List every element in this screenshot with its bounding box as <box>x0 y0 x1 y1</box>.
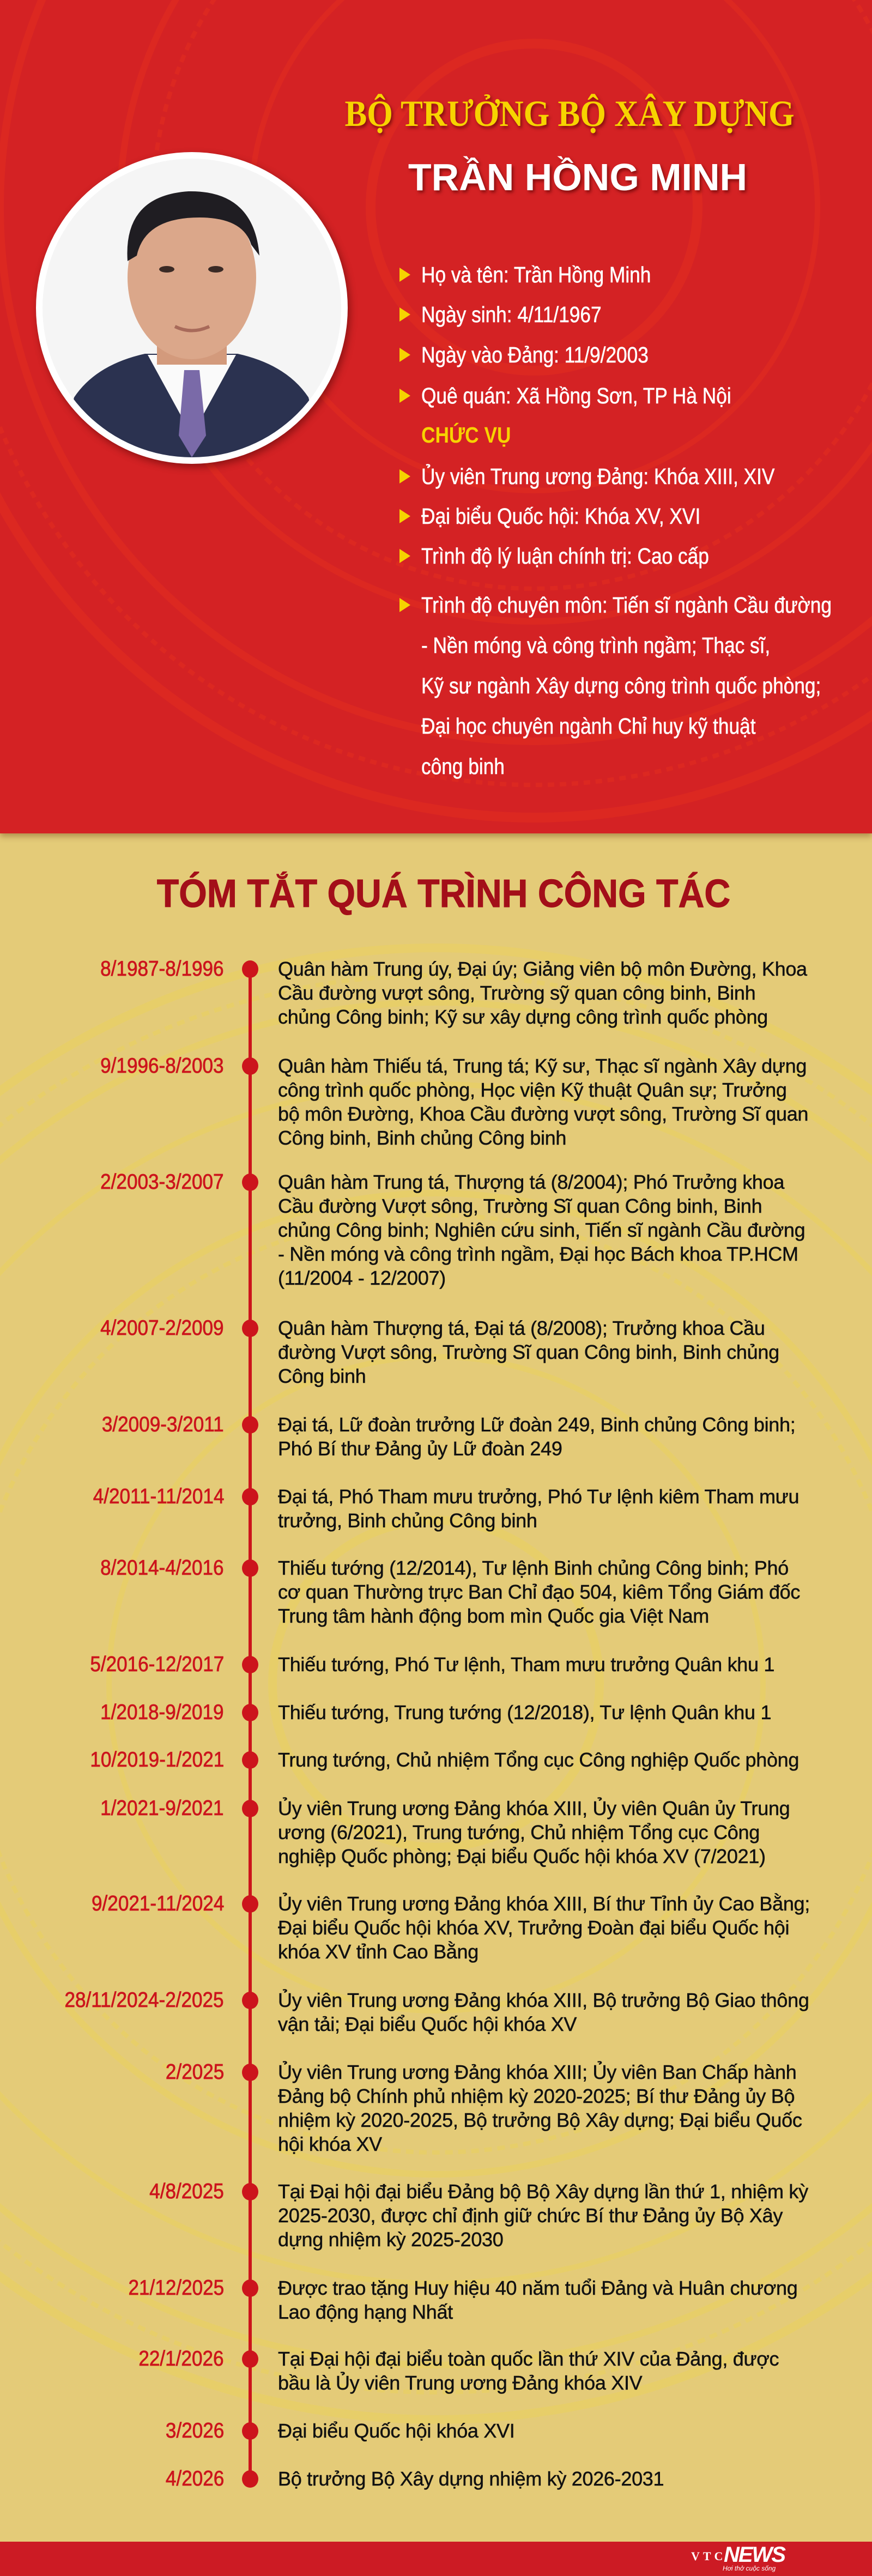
info list: Họ và tên: Trần Hồng Minh <box>421 262 651 287</box>
entry 11: Ủy viên Trung ương Đảng khóa XIII, Ủy viên Quân ủy Trung <box>278 1797 790 1819</box>
logo: VTC News: VTC <box>691 2549 726 2563</box>
entry 16: Lao động hạng Nhất <box>278 2301 453 2323</box>
entry 4: Quân hàm Thượng tá, Đại tá (8/2008); Trưởng khoa Cầu <box>278 1317 765 1339</box>
entry 15: Tại Đại hội đại biểu Đảng bộ Bộ Xây dựng lần thứ 1, nhiệm kỳ <box>278 2180 808 2203</box>
entry 11 <box>101 1797 790 1867</box>
entry 17: Tại Đại hội đại biểu toàn quốc lần thứ XIV của Đảng, được <box>278 2348 779 2370</box>
timeline axis <box>249 969 252 2479</box>
entry 4: đường Vượt sông, Trường Sĩ quan Công binh, Binh chủng <box>278 1341 779 1363</box>
entry 14: nhiệm kỳ 2020-2025, Bộ trưởng Bộ Xây dựng; Đại biểu Quốc <box>278 2109 802 2131</box>
entry 16: 21/12/2025 <box>128 2276 224 2300</box>
entry 14: Đảng bộ Chính phủ nhiệm kỳ 2020-2025; Bí thư Đảng ủy Bộ <box>278 2085 795 2107</box>
entry 19: Bộ trưởng Bộ Xây dựng nhiệm kỳ 2026-2031 <box>278 2468 664 2490</box>
entry 1: 8/1987-8/1996 <box>101 957 224 981</box>
entry 6: 4/2011-11/2014 <box>93 1485 224 1508</box>
entry 15: dựng nhiệm kỳ 2025-2030 <box>278 2228 503 2251</box>
info list: công binh <box>421 754 505 779</box>
entry 3: chủng Công binh; Nghiên cứu sinh, Tiến sĩ ngành Cầu đường <box>278 1219 805 1241</box>
entry 6 <box>93 1485 799 1532</box>
entry 14 <box>166 2060 802 2155</box>
entry 7 <box>101 1556 800 1627</box>
info list: Ngày vào Đảng: 11/9/2003 <box>421 342 649 367</box>
entry 3 <box>101 1170 805 1289</box>
name heading: TRẦN HỒNG MINH <box>408 156 747 198</box>
timeline <box>65 957 810 2490</box>
entry 7: cơ quan Thường trực Ban Chỉ đạo 504, kiêm Tổng Giám đốc <box>278 1581 800 1603</box>
entry 8: Thiếu tướng, Phó Tư lệnh, Tham mưu trưởng Quân khu 1 <box>278 1653 774 1676</box>
entry 16 <box>128 2276 797 2323</box>
entry 12 <box>92 1892 810 1963</box>
entry 18 <box>166 2419 514 2442</box>
logo: VTC News: NEWS <box>724 2543 785 2567</box>
entry 6: Đại tá, Phó Tham mưu trưởng, Phó Tư lệnh kiêm Tham mưu <box>278 1485 799 1508</box>
entry 14: Ủy viên Trung ương Đảng khóa XIII; Ủy viên Ban Chấp hành <box>278 2061 796 2083</box>
entry 13: vận tải; Đại biểu Quốc hội khóa XV <box>278 2013 577 2035</box>
portrait photo <box>36 152 348 464</box>
info list <box>399 262 832 779</box>
entry 15: 4/8/2025 <box>149 2180 224 2203</box>
info list: CHỨC VỤ <box>421 422 511 448</box>
info: expertise <box>399 592 832 779</box>
entry 15: 2025-2030, được chỉ định giữ chức Bí thư Đảng ủy Bộ Xây <box>278 2204 783 2227</box>
entry 9: 1/2018-9/2019 <box>101 1701 224 1724</box>
entry 12: Đại biểu Quốc hội khóa XV, Trưởng Đoàn đại biểu Quốc hội <box>278 1916 789 1939</box>
info list: Ngày sinh: 4/11/1967 <box>421 302 602 327</box>
entry 2: Quân hàm Thiếu tá, Trung tá; Kỹ sư, Thạc sĩ ngành Xây dựng <box>278 1055 807 1077</box>
info list: Đại học chuyên ngành Chỉ huy kỹ thuật <box>421 713 756 739</box>
entry 12: Ủy viên Trung ương Đảng khóa XIII, Bí thư Tỉnh ủy Cao Bằng; <box>278 1892 810 1915</box>
entry 4 <box>100 1316 779 1387</box>
entry 6: trưởng, Binh chủng Công binh <box>278 1509 537 1532</box>
entry 7: Trung tâm hành động bom mìn Quốc gia Việt Nam <box>278 1605 709 1627</box>
entry 5: 3/2009-3/2011 <box>102 1413 224 1436</box>
entry 5: Đại tá, Lữ đoàn trưởng Lữ đoàn 249, Binh chủng Công binh; <box>278 1413 795 1436</box>
entry 3: Cầu đường Vượt sông, Trường Sĩ quan Công binh, Binh <box>278 1195 762 1217</box>
info: national assembly <box>399 504 700 529</box>
entry 12: 9/2021-11/2024 <box>92 1892 224 1915</box>
info list: Quê quán: Xã Hồng Sơn, TP Hà Nội <box>421 383 731 408</box>
entry 3: 2/2003-3/2007 <box>101 1170 224 1194</box>
info: name <box>399 262 651 287</box>
info: political <box>399 543 709 569</box>
entry 9: Thiếu tướng, Trung tướng (12/2018), Tư lệnh Quân khu 1 <box>278 1701 771 1724</box>
entry 2: 9/1996-8/2003 <box>101 1054 224 1078</box>
entry 13: Ủy viên Trung ương Đảng khóa XIII, Bộ trưởng Bộ Giao thông <box>278 1989 809 2011</box>
entry 1 <box>101 957 808 1028</box>
info list: Kỹ sư ngành Xây dựng công trình quốc phòng; <box>421 673 821 698</box>
entry 12: khóa XV tỉnh Cao Bằng <box>278 1940 479 1963</box>
footer bar <box>0 2542 872 2576</box>
entry 15 <box>149 2180 809 2251</box>
entry 14: hội khóa XV <box>278 2133 382 2155</box>
info list: Trình độ lý luận chính trị: Cao cấp <box>421 543 709 569</box>
entry 17: 22/1/2026 <box>139 2347 224 2371</box>
info list: Đại biểu Quốc hội: Khóa XV, XVI <box>421 504 700 529</box>
entry 2: bộ môn Đường, Khoa Cầu đường vượt sông, Trường Sĩ quan <box>278 1103 808 1125</box>
entry 4: 4/2007-2/2009 <box>101 1316 224 1340</box>
entry 11: nghiệp Quốc phòng; Đại biểu Quốc hội khóa XV (7/2021) <box>278 1845 766 1867</box>
entry 18: Đại biểu Quốc hội khóa XVI <box>278 2420 514 2442</box>
entry 3: - Nền móng và công trình ngầm, Đại học Bách khoa TP.HCM <box>278 1243 798 1265</box>
entry 17: bầu là Ủy viên Trung ương Đảng khóa XIV <box>278 2372 642 2394</box>
entry 16: Được trao tặng Huy hiệu 40 năm tuổi Đảng và Huân chương <box>278 2277 797 2299</box>
entry 8 <box>90 1653 774 1676</box>
entry 1: chủng Công binh; Kỹ sư xây dựng công trình quốc phòng <box>278 1006 768 1028</box>
entry 7: 8/2014-4/2016 <box>101 1556 224 1580</box>
entry 17 <box>139 2347 779 2394</box>
logo: VTC News: Hơi thở cuộc sống <box>723 2565 776 2572</box>
entry 1: Cầu đường vượt sông, Trường sỹ quan công binh, Binh <box>278 982 755 1004</box>
entry 8: 5/2016-12/2017 <box>90 1653 224 1676</box>
entry 2: Công binh, Binh chủng Công binh <box>278 1127 566 1149</box>
entry 18: 3/2026 <box>166 2419 224 2442</box>
info: central committee <box>399 464 775 489</box>
entry 1: Quân hàm Trung úy, Đại úy; Giảng viên bộ môn Đường, Khoa <box>278 958 807 980</box>
info: party <box>399 342 649 367</box>
entry 3: (11/2004 - 12/2007) <box>278 1267 446 1289</box>
entry 3: Quân hàm Trung tá, Thượng tá (8/2004); Phó Trưởng khoa <box>278 1171 784 1193</box>
entry 13: 28/11/2024-2/2025 <box>65 1988 224 2012</box>
entry 10: Trung tướng, Chủ nhiệm Tổng cục Công nghiệp Quốc phòng <box>278 1749 799 1771</box>
info list: Ủy viên Trung ương Đảng: Khóa XIII, XIV <box>421 464 774 489</box>
entry 7: Thiếu tướng (12/2014), Tư lệnh Binh chủng Công binh; Phó <box>278 1557 789 1579</box>
title: BỘ TRƯỞNG BỘ XÂY DỰNG <box>344 93 795 134</box>
logo: VTC News <box>691 2543 786 2572</box>
info list: - Nền móng và công trình ngầm; Thạc sĩ, <box>421 633 770 658</box>
entry 19: 4/2026 <box>166 2467 224 2490</box>
timeline heading: TÓM TẮT QUÁ TRÌNH CÔNG TÁC <box>157 872 730 916</box>
entry 5: Phó Bí thư Đảng ủy Lữ đoàn 249 <box>278 1437 562 1460</box>
entry 5 <box>102 1413 795 1460</box>
panel: red header <box>0 0 872 833</box>
entry 2 <box>101 1054 808 1149</box>
entry 11: 1/2021-9/2021 <box>101 1797 224 1820</box>
info list: Trình độ chuyên môn: Tiến sĩ ngành Cầu đường <box>421 592 832 618</box>
info: birth <box>399 302 602 327</box>
info: hometown <box>399 383 731 408</box>
entry 4: Công binh <box>278 1365 366 1387</box>
background pattern lower <box>0 944 872 2424</box>
entry 11: ương (6/2021), Trung tướng, Chủ nhiệm Tổng cục Công <box>278 1821 760 1843</box>
entry 10: 10/2019-1/2021 <box>90 1748 224 1771</box>
entry 13 <box>65 1988 809 2035</box>
entry 2: công trình quốc phòng, Học viện Kỹ thuật Quân sự; Trưởng <box>278 1079 787 1101</box>
entry 14: 2/2025 <box>166 2060 224 2084</box>
